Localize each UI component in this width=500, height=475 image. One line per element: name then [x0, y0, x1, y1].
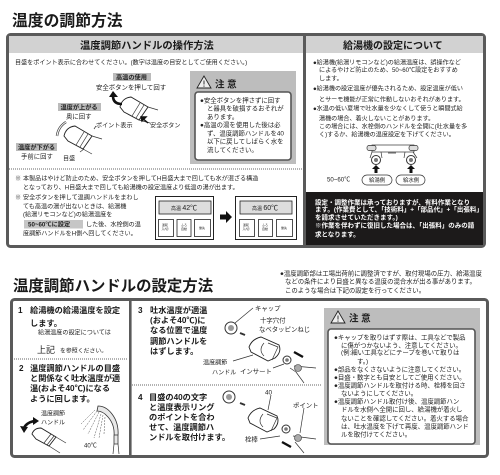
- label: handle: ハンドル: [212, 370, 236, 376]
- panel: caution 1: ●高温の湯を使用した後は必: [200, 120, 281, 129]
- label: screw: [259, 316, 310, 334]
- step 3: (およそ40℃)に: [150, 316, 206, 325]
- icon: handle step 2: [20, 417, 66, 453]
- text: factory setting note: などの条件により目盛と異なる温度の混合水が出る事があります。: [285, 276, 476, 286]
- text: note 2: (給湯リモコンなど)の給湯温度を: [23, 210, 112, 218]
- diagram: remote set to 42: 優先: [199, 225, 205, 230]
- label: stem: 栓棒: [245, 434, 258, 444]
- step 1: [18, 305, 120, 355]
- diagram: step 3 exploded view: [225, 308, 316, 383]
- text: water heater notes: とサーモ機能が正常に作動しないおそれがあります。: [319, 96, 465, 104]
- label: screw: 十字穴付: [260, 316, 286, 324]
- step 3: 吐水温度が適温: [150, 305, 207, 315]
- label: temperature falls: 手前に回す: [21, 152, 53, 160]
- panel: caution 2: す。): [357, 358, 368, 366]
- label: temperature rises: [58, 103, 101, 120]
- label: temperature falls: 温度が下がる: [18, 143, 55, 151]
- diagram: remote set to 60: [236, 196, 296, 240]
- panel: caution 2: [324, 308, 480, 445]
- label: insert: インサート: [240, 368, 272, 376]
- icon: shower: [81, 406, 119, 454]
- text: align scale: 目盛をポイント表示に合わせてください。(数字は温度の目安としてご使用ください。): [15, 58, 247, 66]
- step 4: [138, 392, 230, 442]
- text: factory setting note: [280, 268, 482, 294]
- step 3: なる位置で温度: [150, 325, 207, 335]
- text: note 1: [15, 174, 258, 192]
- text: note 2: 度調節ハンドルをH側へ回してください。: [23, 230, 137, 238]
- label: 40: 40: [265, 390, 273, 396]
- callout: paid service notice: 設定・調整作業は承っておりますが、有料作業となり: [315, 198, 470, 206]
- panel: caution 2: ●キャップを取りはずす際は、工具などで製品: [334, 332, 466, 342]
- label: 40 degrees: 40℃: [84, 442, 97, 450]
- text: water heater notes: ●給湯機(給湯リモコンなど)の給湯温度は、誤操作など: [313, 58, 461, 66]
- text: note 1: 本製品はやけど防止のため、安全ボタンを押してH目盛大まで回しても水が混ざる構造: [23, 174, 258, 182]
- title: temperature adjustment: 温度の調節方法: [12, 11, 123, 30]
- panel: caution 1: 注 意: [215, 78, 237, 90]
- step 3: 3: [138, 306, 143, 315]
- step 4: せて、温度調節ハ: [149, 422, 214, 432]
- panel: caution 1: [190, 71, 296, 164]
- text: water heater notes: ●給湯機の設定温度が優先されるため、設定温度が低い: [313, 84, 463, 92]
- heading: handle operation: 温度調節ハンドルの操作方法: [80, 39, 215, 52]
- label: temperature handle: ハンドル: [41, 420, 65, 426]
- text: water heater notes: く)するか、給湯機の温度設定を下げてください。: [319, 130, 455, 138]
- text: note 2: した後、水栓側の温: [86, 220, 141, 228]
- callout: paid service notice: を請求させていただきます。): [315, 212, 398, 222]
- label: high temperature use: [96, 73, 166, 92]
- text: note 2: ても高温の湯が出ないときは、給湯機: [23, 202, 126, 210]
- panel: caution 1: 以下に戻してしばらく水を: [207, 136, 284, 146]
- label: 50-60 hot side: 50~60℃: [327, 176, 350, 184]
- step 2: [19, 363, 120, 404]
- panel: caution 2: ドルを水側へ全開に回し、給湯機が着火し: [341, 404, 462, 414]
- text: note 1: ※: [15, 176, 21, 182]
- step 1: 上記: [37, 345, 55, 355]
- diagram: remote set to 42: 高温 42℃: [171, 204, 197, 212]
- label: point: ポイント: [293, 402, 319, 410]
- panel: caution 2: ないようにしてください。: [341, 390, 417, 398]
- text: note 2: 50~60℃に設定: [28, 220, 70, 228]
- icon: warning triangle: [331, 311, 345, 323]
- step 3: 調節ハンドルを: [150, 336, 207, 346]
- label: point indicator: ポイント表示: [96, 122, 133, 130]
- icon: warning triangle: [197, 76, 211, 88]
- text: note 1: となっており、H目盛大まで回しても給湯機の設定温度より低温の湯が出ます。: [23, 184, 239, 192]
- step 2: 温度調節ハンドルの目盛: [30, 363, 120, 373]
- panel: caution 2: に傷がつかないよう、注意してください。: [341, 340, 462, 350]
- diagram: remote set to 60: 入/切: [242, 226, 249, 231]
- diagram: remote set to 60: 高温 60℃: [252, 204, 278, 212]
- panel: caution 2: ●温度調節ハンドルを取付ける時、栓棒を回さ: [334, 380, 466, 390]
- panel: caution 2: は、吐水温度を下げて再度、温度調節ハンド: [341, 422, 469, 430]
- step 2: ように回します。: [30, 394, 95, 404]
- label: temperature rises: 奥に回す: [66, 112, 92, 120]
- step 1: 1: [18, 306, 23, 315]
- panel: caution 2: (例:細い工具などにテープを巻いて取りは: [341, 348, 460, 356]
- step 3: [138, 305, 207, 356]
- step 1: を参照ください。: [60, 346, 107, 354]
- icon: arrow: [220, 211, 232, 223]
- step 1: 給湯温度の設定については: [38, 328, 111, 336]
- text: water heater notes: ●水温の低い夏場で吐水量を少なくして使うと瞬間式給: [313, 104, 463, 112]
- panel: caution 2: ルを取付けてください。: [341, 430, 411, 438]
- panel: caution 1: ●安全ボタンを押さずに回す: [200, 96, 281, 104]
- diagram: remote set to 42: [156, 196, 214, 240]
- text: factory setting note: このような場合は下記の設定を行ってください。: [285, 286, 425, 294]
- label: temperature rises: 温度が上がる: [60, 103, 98, 111]
- callout: paid service notice: ます。(作業費として、「技術料」+「部品代」+「出張料」: [315, 204, 483, 214]
- panel: caution 1: 流してください。: [207, 145, 258, 154]
- diagram: remote set to 60: 優先: [281, 225, 287, 230]
- diagram: remote set to 60: 自動: [262, 226, 268, 231]
- label: 50-60 hot side: [327, 175, 392, 185]
- step 4: と温度表示リング: [149, 402, 215, 412]
- text: water heater notes: [313, 58, 467, 138]
- label: safety button: 安全ボタン: [150, 122, 180, 130]
- diagram: remote set to 42: 運転: [162, 222, 168, 227]
- callout: paid service notice: [306, 192, 483, 245]
- step 1: 給湯機の給湯温度を設定: [30, 305, 120, 315]
- diagram: remote set to 60: 運転: [243, 222, 249, 227]
- text: factory setting note: ●温度調節部は工場出荷前に調整済ですが、取付現場の圧力、給湯温度: [280, 268, 482, 278]
- step 2: と関係なく吐水温度が適: [30, 373, 120, 383]
- icon: lower handle with arrow: [57, 122, 102, 154]
- text: note 2: [15, 194, 141, 238]
- diagram: remote set to 42: ふろ: [181, 222, 187, 227]
- label: handle: 温度調節: [203, 358, 227, 366]
- text: note 2: ※: [15, 194, 21, 202]
- step 4: のポイントを合わ: [149, 412, 215, 422]
- step 2: 温(およそ40℃)になる: [30, 383, 110, 393]
- label: cold side: [396, 175, 425, 185]
- step 2: 2: [19, 364, 24, 373]
- step 4: ンドルを取付けます。: [149, 432, 230, 442]
- callout: paid service notice: ※作業を伴わずに復旧した場合は、「出張料」のみの請: [315, 220, 475, 230]
- heading: water heater settings: 給湯機の設定について: [343, 39, 443, 52]
- text: water heater notes: 湯機の場合、着火しないことがあります。: [319, 114, 434, 122]
- label: 50-60 hot side: 給湯側: [369, 176, 386, 184]
- diagram: step 4 assembly view: [223, 391, 316, 453]
- text: water heater notes: によるやけど防止のため、50~60℃設定をおすすめ: [319, 66, 458, 74]
- callout: paid service notice: 求となります。: [315, 230, 360, 238]
- step 3: はずします。: [150, 346, 198, 356]
- panel: caution 1: ず、温度調節ハンドルを40: [207, 128, 284, 138]
- diagram: remote set to 60: ふろ: [262, 222, 268, 227]
- label: high temperature use: 高温の使用: [116, 73, 147, 81]
- panel: caution 2: ないことを確認してください。着火する場合: [341, 414, 469, 422]
- title: handle setting: 温度調節ハンドルの設定方法: [13, 276, 214, 295]
- icon: upper handle with arrow: [109, 91, 158, 123]
- panel: caution 1: あります。: [207, 113, 238, 121]
- diagram: mixer valve: [367, 145, 418, 173]
- panel: caution 2: ●目盛・数字とも目安としてご使用ください。: [334, 372, 465, 382]
- label: temperature handle: [41, 410, 65, 426]
- text: note 2: 安全ボタンを押して温調ハンドルをまわし: [23, 194, 139, 202]
- text: water heater notes: します。: [319, 76, 343, 82]
- label: cap: キャップ: [255, 304, 281, 312]
- panel: caution 2: ●温度調節ハンドル取付け後、温度調節ハン: [334, 396, 459, 406]
- label: scale: 目盛: [63, 154, 75, 162]
- label: temperature handle: 温度調節: [41, 410, 65, 418]
- panel: lower frame: [12, 300, 488, 456]
- step 4: 目盛の40の文字: [149, 392, 207, 402]
- label: temperature falls: [16, 143, 57, 160]
- step 1: します。: [30, 319, 62, 328]
- step 4: 4: [138, 393, 143, 402]
- panel: caution 2: 注 意: [349, 312, 371, 324]
- diagram: remote set to 42: 自動: [181, 226, 187, 231]
- text: water heater notes: この場合には、水栓側のハンドルを全開に(吐水量を多: [319, 122, 467, 130]
- label: cold side: 給水側: [403, 176, 420, 184]
- panel: caution 1: と器具を破損するおそれが: [207, 104, 284, 112]
- label: screw: なべタッピンねじ: [259, 324, 310, 334]
- diagram: remote set to 42: 入/切: [162, 226, 168, 231]
- label: handle: [203, 358, 236, 376]
- label: high temperature use: 安全ボタンを押して回す: [96, 82, 166, 92]
- panel: upper frame: [8, 34, 484, 246]
- panel: caution 2: ●部品をなくさないように注意してください。: [334, 364, 465, 374]
